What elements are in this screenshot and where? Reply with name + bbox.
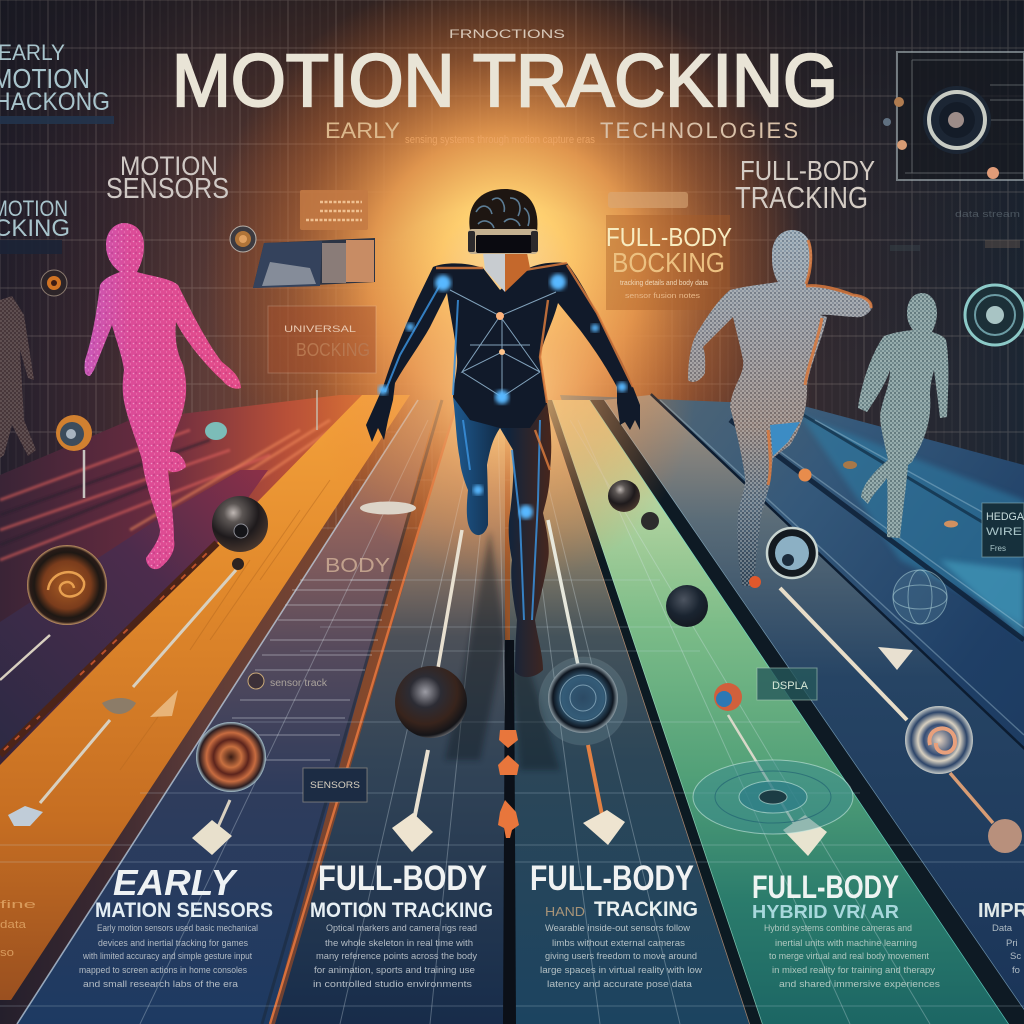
column: full-body tracking: Wearable inside-out sensors follow <box>545 923 690 934</box>
figure shadow <box>445 530 505 760</box>
panel: outlined booking card <box>268 306 376 373</box>
icon: ring right <box>965 285 1024 345</box>
orb: green lane dark <box>666 585 708 627</box>
panel: full-body booking <box>606 192 732 310</box>
small card: lane 1 <box>248 673 328 689</box>
floor lanes <box>0 205 1024 1024</box>
lane 1 hatch <box>205 580 395 760</box>
label: motion sensors: MOTION <box>120 151 218 181</box>
lane right <box>604 395 1024 1024</box>
blue wedge and orange rim <box>770 422 800 456</box>
orange lane <box>0 395 410 1000</box>
column: full-body hybrid vr ar: Hybrid systems combine cameras and <box>764 923 912 934</box>
right floor <box>560 395 1024 1024</box>
orb: small red <box>714 683 742 711</box>
small card: right <box>982 503 1024 557</box>
figure: central runner with vr headset <box>366 189 640 770</box>
column: early motion sensors: with limited accuracy and simple gesture input <box>82 951 252 962</box>
column: full-body tracking: FULL-BODY <box>530 859 694 898</box>
column: full-body tracking: large spaces in virtual reality with low <box>540 965 702 976</box>
orb: dark left <box>212 496 268 552</box>
orb: halo blue <box>539 657 627 745</box>
label: full-body tracking gray: FULL-BODY <box>740 155 875 186</box>
panel: outlined booking card: UNIVERSAL <box>284 324 356 334</box>
lane edge lines <box>17 400 418 1024</box>
column: early motion sensors: devices and inertial tracking for games <box>98 938 248 949</box>
column: full-body motion tracking: in controlled studio environments <box>313 979 472 990</box>
panel: full-body booking: FULL-BODY <box>606 222 732 252</box>
orb: upper small <box>608 480 659 530</box>
floor grid <box>0 580 1024 1006</box>
hair <box>469 189 537 232</box>
icon: small lens far left <box>41 270 67 296</box>
column: full-body hybrid vr ar: FULL-BODY <box>752 869 899 905</box>
column: immersive cut-off <box>978 900 1024 976</box>
small card: right: Fres <box>990 544 1006 553</box>
figure: pale teal body <box>858 293 948 538</box>
small card: lane 1: sensor track <box>270 678 328 689</box>
subtitle early: EARLY <box>325 118 400 143</box>
icon: small lens left <box>230 226 256 252</box>
legs <box>453 397 551 677</box>
small orange markers <box>749 461 958 588</box>
small card: lane 1 lower <box>303 768 367 802</box>
vr headset <box>468 229 538 254</box>
column: immersive cut-off: Sc <box>1010 951 1021 962</box>
text on orange lane: so <box>0 947 14 959</box>
text block: right notes <box>890 209 1020 251</box>
text on orange lane: fine <box>0 899 36 911</box>
column: full-body tracking: HAND <box>545 904 585 919</box>
column: full-body tracking: limbs without external cameras <box>552 938 685 949</box>
left cut-off label: early motion tracking <box>0 40 114 124</box>
column: full-body tracking: latency and accurate pose data <box>547 979 693 990</box>
column: full-body hybrid vr ar: to merge virtual and real body movement <box>769 951 929 962</box>
subtitle technologies: TECHNOLOGIES <box>600 118 798 143</box>
panel: camera device top right <box>883 52 1024 180</box>
column: full-body hybrid vr ar: HYBRID VR/ AR <box>752 902 899 922</box>
pin cards <box>192 820 232 855</box>
neck and face <box>483 253 505 292</box>
column: full-body motion tracking: the whole skeleton in real time with <box>325 938 473 949</box>
column: full-body motion tracking <box>310 859 493 990</box>
panel: photo device <box>253 238 375 288</box>
column: full-body tracking <box>530 859 702 990</box>
panel: full-body booking: sensor fusion notes <box>625 293 701 300</box>
column: early motion sensors <box>79 862 273 990</box>
small card: right: HEDGA <box>986 511 1024 523</box>
lane 3 <box>510 400 750 1024</box>
orb: small lens <box>56 415 92 451</box>
column: immersive cut-off: fo <box>1012 965 1020 976</box>
icon: wire sphere <box>893 570 947 624</box>
column: full-body hybrid vr ar <box>752 869 940 990</box>
column: immersive cut-off: Data <box>992 923 1013 934</box>
column: full-body motion tracking: many reference points across the body <box>316 951 477 962</box>
column: early motion sensors: Early motion sensors used basic mechanical <box>97 923 258 934</box>
figure: pink body <box>85 223 241 569</box>
orb: teal ring <box>767 528 817 578</box>
lane 2 <box>275 400 505 1024</box>
orb: red rings <box>196 722 266 792</box>
left cut-off label: motion tracking <box>0 196 70 254</box>
text on orange lane <box>0 899 36 959</box>
panel: outlined booking card: BOCKING <box>296 340 370 360</box>
panel: full-body booking: BOCKING <box>612 247 725 278</box>
column: early motion sensors: MATION SENSORS <box>95 899 273 922</box>
lane 1 <box>17 400 438 1024</box>
orb: copper far right <box>988 819 1022 853</box>
label: motion sensors <box>106 151 229 205</box>
small label: body on lane: BODY <box>325 555 390 577</box>
column: early motion sensors: EARLY <box>113 862 238 903</box>
orb: small teal <box>205 422 227 440</box>
column: full-body motion tracking: Optical markers and camera rigs read <box>326 923 477 934</box>
column: full-body hybrid vr ar: and shared immersive experiences <box>779 979 940 990</box>
orb: large orange swirl <box>27 545 107 625</box>
column: early motion sensors: mapped to screen actions in home consoles <box>79 965 247 976</box>
column: full-body tracking: giving users freedom to move around <box>545 951 697 962</box>
column: full-body hybrid vr ar: in mixed reality for training and therapy <box>772 965 935 976</box>
subtitle squiggle line: sensing systems through motion capture eras <box>405 134 595 146</box>
small card: green lane: DSPLA <box>772 680 809 692</box>
orb: spiral right <box>905 706 973 774</box>
column: full-body tracking: TRACKING <box>594 898 698 921</box>
column: full-body motion tracking: MOTION TRACKING <box>310 899 493 922</box>
pointer: lines and pins <box>0 390 993 856</box>
column: immersive cut-off: Pri <box>1006 938 1018 949</box>
center strip <box>503 640 516 1024</box>
title: MOTION TRACKING <box>172 39 838 122</box>
small card: lane 1 lower: SENSORS <box>310 780 360 790</box>
column: early motion sensors: and small research labs of the era <box>83 979 239 990</box>
figure: dim far-left silhouette <box>0 296 36 458</box>
figure: silver body <box>688 230 872 587</box>
label: full-body tracking gray <box>735 155 875 215</box>
column: full-body hybrid vr ar: inertial units with machine learning <box>775 938 917 949</box>
panel: orange text card <box>300 190 368 230</box>
tracking nodes <box>378 274 627 519</box>
top label: functions: FRNOCTIONS <box>449 27 565 41</box>
small card: right: WIRE <box>986 526 1022 538</box>
label: full-body tracking gray: TRACKING <box>735 180 868 215</box>
ripple rings on green lane <box>693 760 853 834</box>
text on orange lane: data <box>0 919 27 931</box>
small card: green lane <box>757 668 817 700</box>
suit highlights <box>385 285 540 620</box>
lane green <box>552 400 1009 1024</box>
upper body <box>366 263 640 442</box>
text block: right notes: data stream <box>955 209 1020 219</box>
orb: dark silver center <box>395 666 467 738</box>
column: full-body motion tracking: FULL-BODY <box>318 859 487 898</box>
left floor <box>0 395 410 770</box>
column: full-body motion tracking: for animation, sports and training use <box>314 965 475 976</box>
left cut-off label: early motion tracking: EARLY <box>0 40 65 65</box>
label: motion sensors: SENSORS <box>106 173 229 205</box>
panel: full-body booking: tracking details and body data <box>620 280 708 287</box>
